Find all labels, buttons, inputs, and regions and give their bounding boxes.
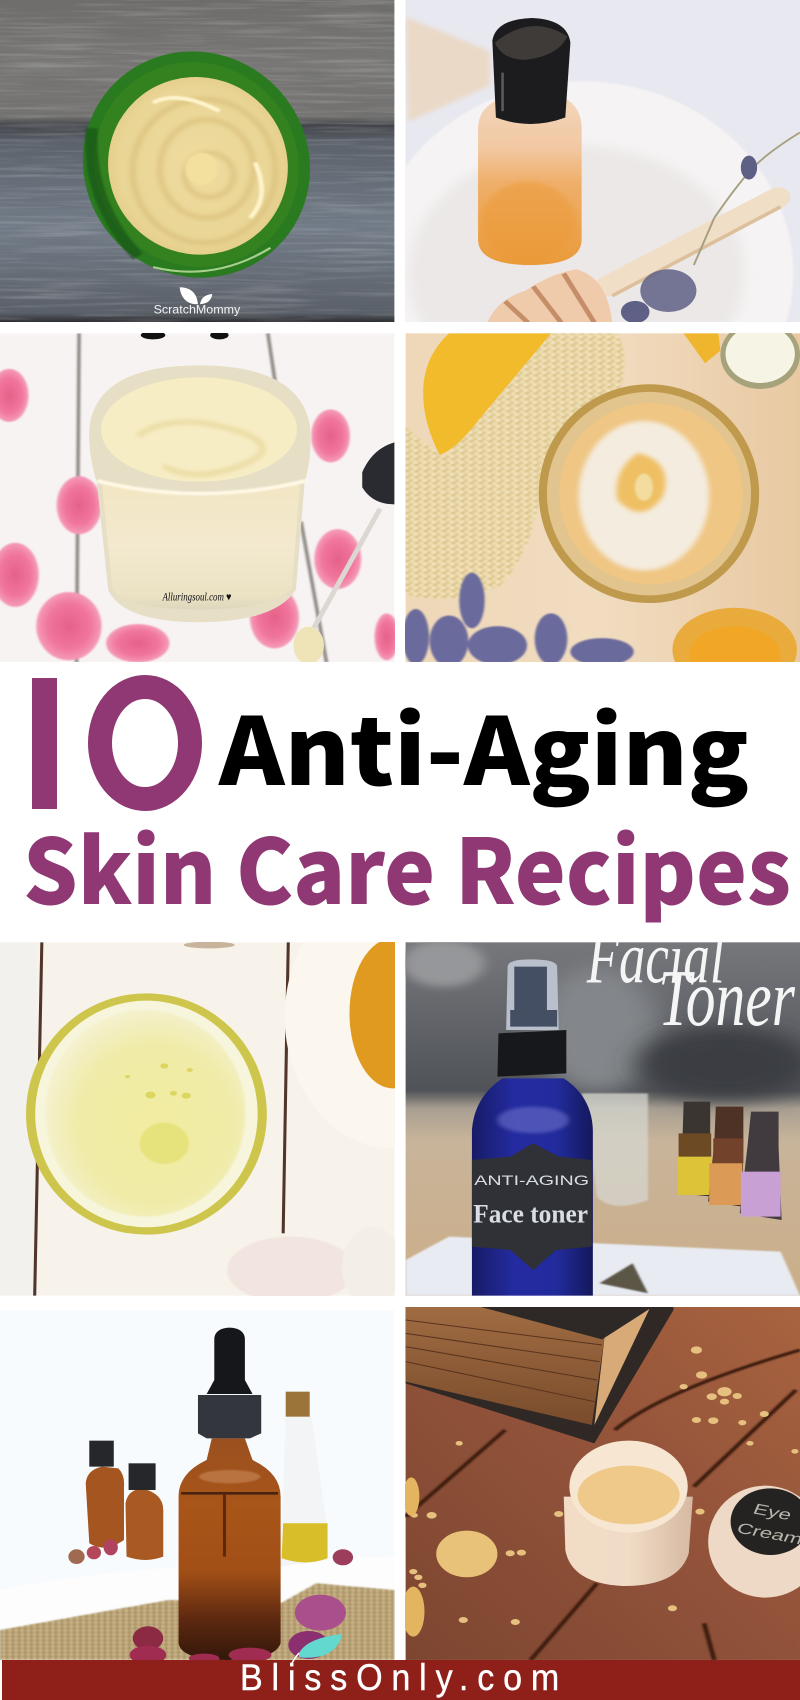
open cream jar bbox=[564, 1441, 693, 1586]
jar lid with Eye Cream label: Eye bbox=[750, 1501, 794, 1524]
burlap cloth bbox=[406, 17, 490, 122]
essential oil bottles bbox=[678, 1102, 782, 1220]
small amber bottles bbox=[86, 1441, 163, 1560]
small glass jar bbox=[582, 1093, 648, 1206]
panel: egg white bowl bbox=[0, 942, 395, 1296]
title block bbox=[23, 677, 791, 930]
panel: amber dropper bottle on burlap bbox=[0, 1310, 394, 1664]
old book bbox=[406, 1307, 673, 1443]
black bottle cap bbox=[492, 18, 570, 124]
amber bottle bbox=[478, 18, 582, 265]
footer bar bbox=[2, 1634, 800, 1700]
banana bbox=[423, 333, 551, 455]
lavender bbox=[403, 573, 634, 667]
honey dipper bbox=[487, 197, 781, 323]
footer text: BlissOnly.com: BlissOnly.com bbox=[240, 1657, 559, 1698]
panel: honey bottle on white plate bbox=[405, 0, 800, 322]
white dish with yolk bbox=[285, 942, 395, 1148]
glass bowl with egg white bbox=[26, 993, 267, 1235]
large dropper bottle bbox=[179, 1328, 281, 1660]
dried rosebuds bbox=[68, 1539, 353, 1664]
eggshell bbox=[227, 1237, 395, 1296]
dropper bbox=[293, 442, 394, 664]
icon: feather bbox=[291, 1634, 342, 1665]
honey jar bbox=[672, 608, 797, 662]
dried lavender bbox=[599, 1263, 648, 1293]
glass jar bbox=[89, 365, 311, 622]
green bowl bbox=[82, 52, 310, 278]
cream swirl bbox=[108, 77, 288, 255]
oats bbox=[406, 333, 625, 599]
blue spray bottle bbox=[472, 959, 593, 1296]
panel: oats, banana and honey mask bbox=[405, 333, 800, 662]
title: Anti-Aging: Anti-Aging bbox=[218, 677, 749, 812]
pink flowers bbox=[0, 369, 399, 662]
white plate bbox=[405, 82, 793, 322]
lavender sprig bbox=[621, 132, 800, 323]
wax pellets bbox=[402, 1346, 798, 1637]
watermark: ScratchMommy bbox=[154, 287, 240, 316]
glass bowl with mask bbox=[539, 384, 759, 603]
script heading: Facial Toner bbox=[586, 942, 796, 1026]
panel: cream jar with pink flowers bbox=[0, 331, 399, 664]
bottle label bbox=[472, 1143, 592, 1270]
watermark: Alluringsoul: Alluringsoul.com ♥ bbox=[162, 591, 231, 603]
burlap bbox=[0, 1583, 394, 1660]
white cloth bbox=[406, 1237, 800, 1296]
panel: eye cream jar on brown wood bbox=[402, 1307, 800, 1660]
cork oil bottle bbox=[281, 1392, 328, 1567]
panel: blue anti-aging face toner bottle bbox=[403, 918, 800, 1296]
panel: green bowl of cream on grey wood bbox=[0, 0, 394, 323]
title: number 10 bbox=[32, 678, 190, 809]
blue spray bottle: Face toner bbox=[473, 1200, 588, 1229]
blue spray bottle: ANTI-AGING bbox=[474, 1173, 589, 1188]
watermark: ScratchMommy: ScratchMommy bbox=[154, 302, 240, 316]
jar lid with Eye Cream label bbox=[708, 1486, 800, 1598]
milk cup bbox=[720, 333, 800, 389]
